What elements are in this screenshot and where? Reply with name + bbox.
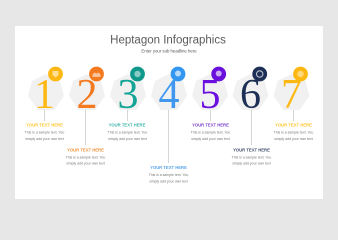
step 7 <box>274 67 313 141</box>
panel: white card <box>15 26 323 199</box>
step 4: simply add your own text <box>149 180 188 184</box>
step 6: YOUR TEXT HERE <box>233 147 270 152</box>
step 7: This is a sample text. You <box>274 130 313 134</box>
step 5: 5 <box>200 72 220 118</box>
subtitle: Enter your sub headline here <box>141 48 197 54</box>
step 2: YOUR TEXT HERE <box>67 147 104 152</box>
step 6: 6 <box>240 72 261 118</box>
step 3: 3 <box>118 72 138 118</box>
step 2: This is a sample text. You <box>66 155 105 159</box>
step 3: This is a sample text. You <box>108 130 147 134</box>
step 1: YOUR TEXT HERE <box>26 122 63 128</box>
step 6: simply add your own text <box>232 162 271 166</box>
step 5: YOUR TEXT HERE <box>192 122 229 128</box>
step 4: YOUR TEXT HERE <box>150 165 187 170</box>
step 5: simply add your own text <box>191 137 230 141</box>
step 4 <box>149 67 188 184</box>
step 1: 1 <box>34 72 55 118</box>
step 1 <box>25 67 64 141</box>
step 5: This is a sample text. You <box>191 130 230 134</box>
step 4: This is a sample text. You <box>149 173 188 177</box>
step 7: YOUR TEXT HERE <box>275 122 312 128</box>
step 2: simply add your own text <box>66 162 105 166</box>
step 2: 2 <box>76 72 98 118</box>
step 3: YOUR TEXT HERE <box>109 122 146 128</box>
step 5 <box>191 67 230 141</box>
step 3 <box>108 67 147 141</box>
step 7: 7 <box>281 72 302 118</box>
step 7: simply add your own text <box>274 137 313 141</box>
step 6: This is a sample text. You <box>232 155 271 159</box>
step 1: This is a sample text. You <box>25 130 64 134</box>
step 2 <box>66 67 105 166</box>
step 3: simply add your own text <box>108 137 147 141</box>
step 6 <box>232 67 271 166</box>
step 4: 4 <box>158 72 180 118</box>
title: Heptagon Infographics <box>110 34 226 46</box>
step 1: simply add your own text <box>25 137 64 141</box>
